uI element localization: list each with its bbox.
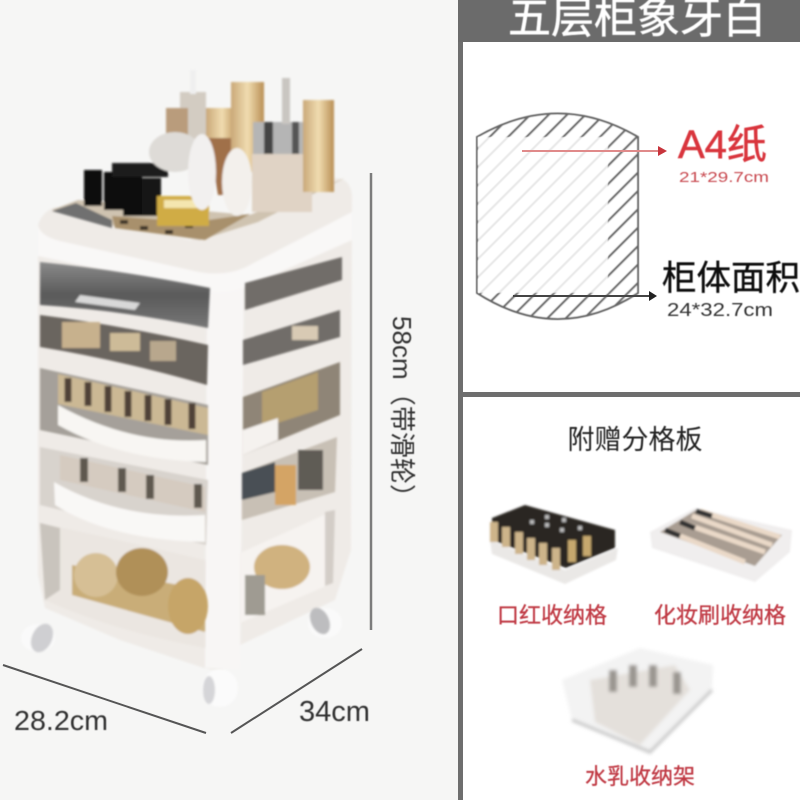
header band <box>458 0 800 43</box>
A4 label: A4纸 <box>678 123 767 167</box>
front drawers <box>40 262 210 648</box>
cabinet size: 24*32.7cm <box>667 300 773 320</box>
accessory: lipstick tray <box>490 505 618 584</box>
cabinet area label: 柜体面积 <box>662 260 800 298</box>
red arrow <box>522 146 667 156</box>
dimension: height label: 58cm（带滑轮） <box>387 316 417 510</box>
dimension: depth label: 34cm <box>299 696 370 728</box>
A4 size: 21*29.7cm <box>679 169 769 186</box>
panel: right column <box>458 0 800 800</box>
dimension: height line <box>370 173 372 630</box>
top tray contents <box>52 70 345 240</box>
label: lotion rack: 水乳收纳架 <box>585 764 695 789</box>
black arrow <box>513 291 657 301</box>
dimension: depth line <box>231 649 362 733</box>
dimension: width label: 28.2cm <box>14 705 108 736</box>
accessory: lotion rack <box>562 648 713 755</box>
side drawers <box>240 257 342 623</box>
label: brush tray: 化妆刷收纳格 <box>654 603 786 628</box>
cabinet outline with hatching <box>477 114 638 319</box>
dimension: width line <box>3 665 206 733</box>
product: five-tier cabinet <box>21 70 352 707</box>
diagram: A4 paper vs cabinet area <box>477 114 800 320</box>
accessory: brush tray <box>650 508 792 582</box>
casters <box>21 605 342 707</box>
label: lipstick tray: 口红收纳格 <box>497 603 607 628</box>
heading: included dividers: 附赠分格板 <box>568 425 702 455</box>
cabinet body <box>38 178 352 672</box>
A4 paper area <box>478 137 608 293</box>
